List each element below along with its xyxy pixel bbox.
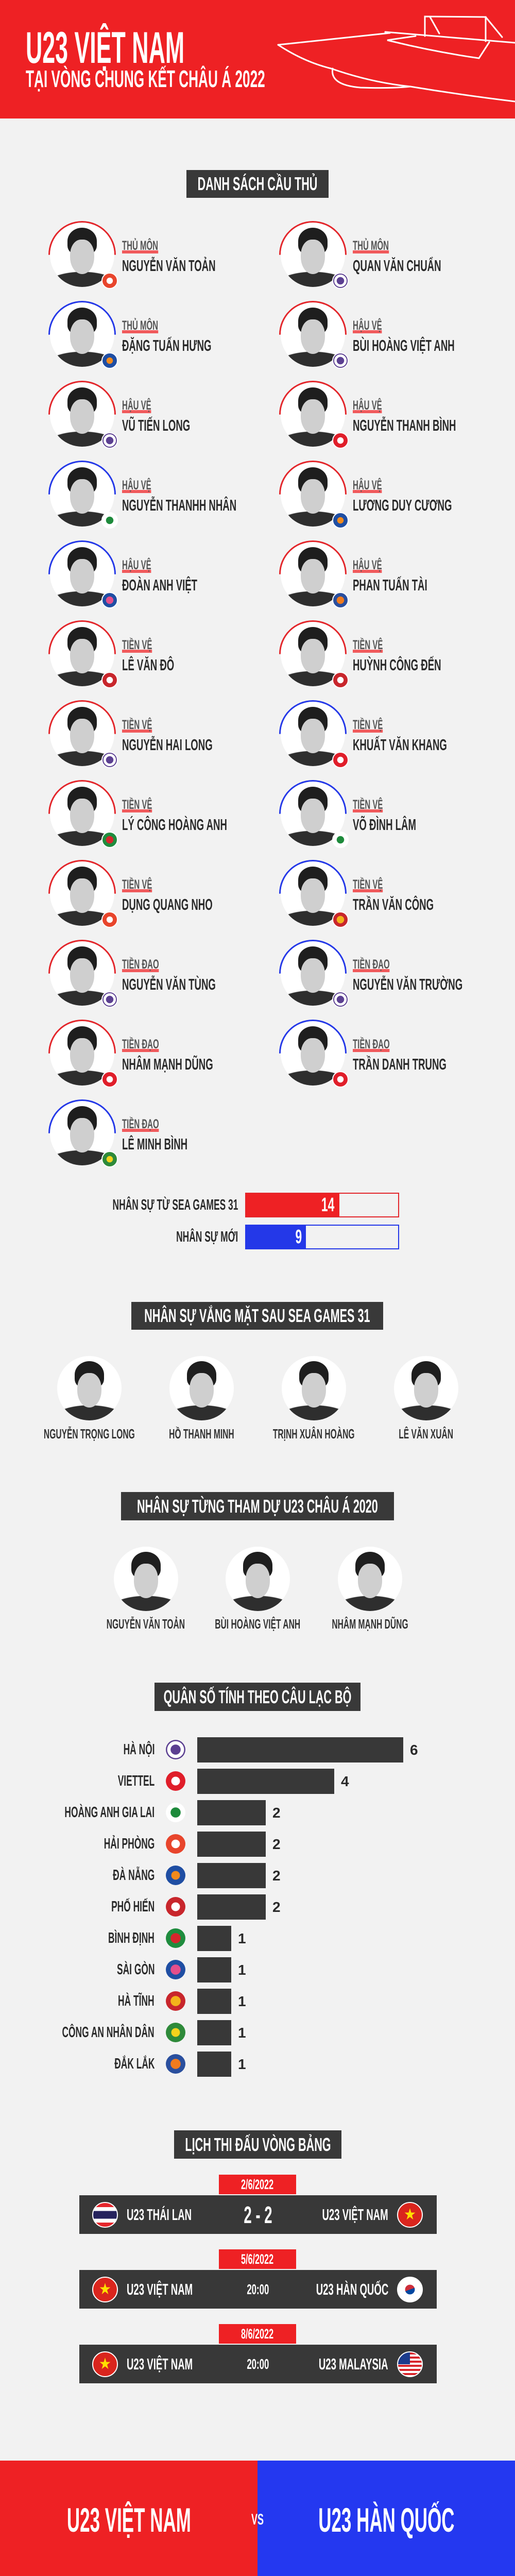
player: Tran Danh Trung [279, 1020, 447, 1088]
club: Viettel: 4 [341, 1773, 349, 1789]
player: Nguyen Van Toan: NGUYỄN VĂN TOẢN [122, 257, 216, 275]
versus banner [0, 2461, 515, 2576]
veteran: Bui Hoang Viet Anh [215, 1547, 300, 1631]
club: Binh Dinh: BÌNH ĐỊNH [108, 1930, 154, 1946]
absent: Le Van Xuan: LÊ VĂN XUÂN [399, 1426, 453, 1442]
absent: Nguyen Trong Long: NGUYỄN TRỌNG LONG [44, 1426, 134, 1442]
veteran: Nguyen Van Toan: NGUYỄN VĂN TOẢN [107, 1616, 185, 1631]
club: Hai Phong: 2 [272, 1836, 281, 1852]
player: Nguyen Thanhh Nhan [48, 461, 236, 529]
club: Binh Dinh: 1 [238, 1930, 246, 1946]
club: Viettel: VIETTEL [117, 1773, 154, 1789]
player: Doan Anh Viet: HẬU VỆ [122, 558, 151, 572]
club: Sai Gon: 1 [238, 1962, 246, 1978]
player: Quan Van Chuan: QUAN VĂN CHUẨN [353, 257, 441, 275]
player: Khuat Van Khang: TIỀN VỆ [353, 718, 383, 732]
date tag 2 [219, 2249, 296, 2269]
club: Da Nang: 2 [272, 1868, 281, 1884]
player: Phan Tuan Tai: PHAN TUẤN TÀI [353, 576, 427, 594]
match 3 [79, 2345, 437, 2383]
player: Quan Van Chuan [279, 221, 441, 289]
match 1: U23 VIỆT NAM [322, 2205, 388, 2224]
player: Nham Manh Dung: TIỀN ĐẠO [122, 1037, 159, 1052]
club: Da Nang [0, 1863, 464, 1888]
player: Luong Duy Cuong: HẬU VỆ [353, 478, 382, 493]
player: Khuat Van Khang: KHUẤT VĂN KHANG [353, 736, 447, 754]
bar: 14: 14 [321, 1194, 334, 1216]
heading: absent players: NHÂN SỰ VẮNG MẶT SAU SEA GAMES 31 [144, 1305, 370, 1326]
club: Dak Lak: 1 [238, 2056, 246, 2072]
date tag 1 [219, 2175, 296, 2194]
match 3: U23 VIỆT NAM [127, 2354, 193, 2373]
player: Nguyen Van Truong: TIỀN ĐẠO [353, 957, 390, 972]
subtitle: TẠI VÒNG CHUNG KẾT CHÂU Á 2022 [26, 65, 265, 92]
club: Viettel [0, 1769, 464, 1794]
bar chart: players per club [62, 1737, 418, 2077]
icon: pitch goal drawing [277, 15, 515, 102]
player: Luong Duy Cuong [279, 461, 452, 529]
player: Vu Tien Long: VŨ TIẾN LONG [122, 416, 190, 434]
club: Pho Hien: 2 [272, 1899, 281, 1915]
club: Binh Dinh [0, 1926, 464, 1951]
club: CAND: 1 [238, 2025, 246, 2041]
club: Pho Hien: PHỐ HIẾN [111, 1899, 154, 1915]
panel: 2020 veterans [107, 1547, 408, 1631]
date tag 3 [219, 2324, 296, 2344]
player: Vo Dinh Lam [279, 780, 416, 848]
player: Tran Van Cong [279, 860, 434, 928]
club: Ha Noi: HÀ NỘI [123, 1741, 154, 1758]
match 1: 2 - 2 [244, 2201, 272, 2228]
player: Ly Cong Hoang Anh: LÝ CÔNG HOÀNG ANH [122, 816, 227, 834]
team: korea: U23 HÀN QUỐC [318, 2501, 454, 2539]
absent: Ho Thanh Minh [169, 1356, 234, 1442]
player: Le Van Do: LÊ VĂN ĐÔ [122, 656, 174, 674]
heading: U23 Asia 2020 veterans: NHÂN SỰ TỪNG THAM DỰ U23 CHÂU Á 2020 [137, 1495, 378, 1517]
player: Le Minh Binh [48, 1099, 187, 1167]
club: Dak Lak [0, 2052, 464, 2077]
player: Luong Duy Cuong: LƯƠNG DUY CƯƠNG [353, 496, 452, 514]
player: Nguyen Van Truong [279, 940, 462, 1008]
heading: danh sach cau thu [186, 170, 329, 198]
club: HAGL [0, 1800, 464, 1825]
heading: absent players [131, 1302, 383, 1330]
player: Vu Tien Long: HẬU VỆ [122, 398, 151, 413]
player: Dang Tuan Hung: ĐẶNG TUẤN HƯNG [122, 336, 212, 354]
vs: VS [251, 2511, 264, 2528]
match 1: U23 THÁI LAN [127, 2205, 192, 2224]
match 3: U23 MALAYSIA [319, 2354, 388, 2373]
player: Nguyen Van Truong: NGUYỄN VĂN TRƯỜNG [353, 975, 462, 993]
club: Pho Hien [0, 1894, 464, 1920]
player: Nham Manh Dung: NHÂM MẠNH DŨNG [122, 1055, 213, 1073]
team: vietnam: U23 VIỆT NAM [66, 2501, 191, 2539]
veteran: Nguyen Van Toan [107, 1547, 185, 1631]
club: Hai Phong: HẢI PHÒNG [104, 1836, 154, 1852]
club: Hai Phong [0, 1832, 464, 1857]
club: HAGL: 2 [272, 1805, 281, 1821]
player: Nguyen Van Tung [48, 940, 216, 1008]
bar: 9 [245, 1225, 399, 1249]
heading: danh sach cau thu: DANH SÁCH CẦU THỦ [198, 173, 317, 194]
match 1 [79, 2195, 437, 2234]
match 2: 20:00 [247, 2281, 269, 2297]
player: Huynh Cong Den: HUỲNH CÔNG ĐẾN [353, 656, 441, 674]
bar: 14 [245, 1193, 399, 1217]
player: Vo Dinh Lam: VÕ ĐÌNH LÂM [353, 816, 416, 834]
player: Dung Quang Nho: TIỀN VỆ [122, 877, 152, 892]
club: CAND: CÔNG AN NHÂN DÂN [62, 2024, 154, 2041]
absent: Ho Thanh Minh: HỒ THANH MINH [169, 1426, 234, 1442]
veteran: Nham Manh Dung [332, 1547, 408, 1631]
club: HAGL: HOÀNG ANH GIA LAI [64, 1804, 154, 1821]
player: Doan Anh Viet [48, 540, 197, 608]
label: new: NHÂN SỰ MỚI [176, 1228, 238, 1245]
veteran: Bui Hoang Viet Anh: BÙI HOÀNG VIỆT ANH [215, 1616, 300, 1631]
match 1: ★ [404, 2206, 416, 2223]
chart: squad composition bars [112, 1193, 399, 1249]
absent: Le Van Xuan [394, 1356, 458, 1442]
player: Ly Cong Hoang Anh: TIỀN VỆ [122, 798, 152, 812]
player: Dang Tuan Hung: THỦ MÔN [122, 318, 158, 333]
player: Tran Van Cong: TRẦN VĂN CÔNG [353, 895, 434, 913]
player: Vo Dinh Lam: TIỀN VỆ [353, 798, 383, 812]
player: Nguyen Thanhh Nhan: HẬU VỆ [122, 478, 151, 493]
club: Ha Tinh: 1 [238, 1993, 246, 2009]
player: Nguyen Thanh Binh: HẬU VỆ [353, 398, 382, 413]
club: Ha Tinh: HÀ TĨNH [118, 1993, 154, 2009]
player: Tran Van Cong: TIỀN VỆ [353, 877, 383, 892]
player: Nguyen Hai Long [48, 700, 213, 768]
player: Phan Tuan Tai: HẬU VỆ [353, 558, 382, 572]
club: Ha Noi: 6 [410, 1742, 418, 1758]
player: Nguyen Van Toan: THỦ MÔN [122, 239, 158, 253]
player: Nguyen Thanhh Nhan: NGUYỄN THANHH NHÂN [122, 496, 236, 514]
player: Nham Manh Dung [48, 1020, 213, 1088]
player: Le Minh Binh: LÊ MINH BÌNH [122, 1135, 187, 1153]
player: Nguyen Van Tung: TIỀN ĐẠO [122, 957, 159, 972]
player: Nguyen Thanh Binh: NGUYỄN THANH BÌNH [353, 416, 456, 434]
club: Ha Tinh [0, 1989, 464, 2014]
date tag 3: 8/6/2022 [241, 2326, 274, 2341]
club: Ha Noi [0, 1737, 464, 1762]
player: Quan Van Chuan: THỦ MÔN [353, 239, 389, 253]
player: Bui Hoang Viet Anh: HẬU VỆ [353, 318, 382, 333]
heading: clubs [154, 1683, 360, 1711]
player: Phan Tuan Tai [279, 540, 427, 608]
player: Ly Cong Hoang Anh [48, 780, 227, 848]
heading: group schedule: LỊCH THI ĐẤU VÒNG BẢNG [185, 2134, 331, 2155]
absent: Nguyen Trong Long [44, 1356, 134, 1442]
absent: Trinh Xuan Hoang: TRỊNH XUÂN HOÀNG [273, 1426, 354, 1442]
heading: clubs: QUÂN SỐ TÍNH THEO CÂU LẠC BỘ [164, 1686, 351, 1707]
match 2: U23 VIỆT NAM [127, 2280, 193, 2298]
absent: Trinh Xuan Hoang [273, 1356, 354, 1442]
player: Doan Anh Viet: ĐOÀN ANH VIỆT [122, 576, 197, 594]
player: Nguyen Hai Long: NGUYỄN HAI LONG [122, 736, 213, 754]
club: Dak Lak: ĐẮK LẮK [114, 2056, 154, 2072]
player: Tran Danh Trung: TIỀN ĐẠO [353, 1037, 390, 1052]
player: Le Van Do [48, 620, 174, 688]
match 2: U23 HÀN QUỐC [316, 2280, 388, 2298]
player: Dung Quang Nho: DỤNG QUANG NHO [122, 895, 213, 913]
player: Nguyen Thanh Binh [279, 381, 456, 449]
title: U23 VIỆT NAM [26, 23, 184, 73]
player list [48, 221, 462, 1167]
player: Bui Hoang Viet Anh [279, 301, 455, 369]
player: Dang Tuan Hung [48, 301, 212, 369]
club: Sai Gon: SÀI GÒN [117, 1961, 154, 1978]
player: Nguyen Hai Long: TIỀN VỆ [122, 718, 152, 732]
club: CAND [0, 2020, 464, 2045]
bar: 9: 9 [295, 1226, 302, 1248]
match 2 [79, 2270, 437, 2309]
date tag 2: 5/6/2022 [241, 2251, 274, 2267]
heading: U23 Asia 2020 veterans [121, 1492, 394, 1520]
header banner [0, 0, 515, 118]
match 2: ★ [99, 2281, 111, 2298]
player: Dung Quang Nho [48, 860, 213, 928]
club: Da Nang: ĐÀ NẴNG [113, 1867, 154, 1884]
player: Bui Hoang Viet Anh: BÙI HOÀNG VIỆT ANH [353, 336, 455, 354]
heading: group schedule [174, 2130, 341, 2159]
player: Le Van Do: TIỀN VỆ [122, 638, 152, 652]
player: Vu Tien Long [48, 381, 190, 449]
player: Nguyen Van Toan [48, 221, 216, 289]
label: sea games: NHÂN SỰ TỪ SEA GAMES 31 [112, 1196, 238, 1213]
player: Huynh Cong Den [279, 620, 441, 688]
date tag 1: 2/6/2022 [241, 2176, 274, 2192]
match 3: ★ [99, 2355, 111, 2372]
player: Le Minh Binh: TIỀN ĐẠO [122, 1117, 159, 1131]
player: Tran Danh Trung: TRẦN DANH TRUNG [353, 1055, 447, 1073]
club: Sai Gon [0, 1957, 464, 1982]
panel: absent players [44, 1356, 458, 1442]
veteran: Nham Manh Dung: NHÂM MẠNH DŨNG [332, 1616, 408, 1631]
player: Khuat Van Khang [279, 700, 447, 768]
match 3: 20:00 [247, 2355, 269, 2372]
panel: match schedule [0, 2174, 515, 2385]
player: Huynh Cong Den: TIỀN VỆ [353, 638, 383, 652]
player: Nguyen Van Tung: NGUYỄN VĂN TÙNG [122, 975, 216, 993]
